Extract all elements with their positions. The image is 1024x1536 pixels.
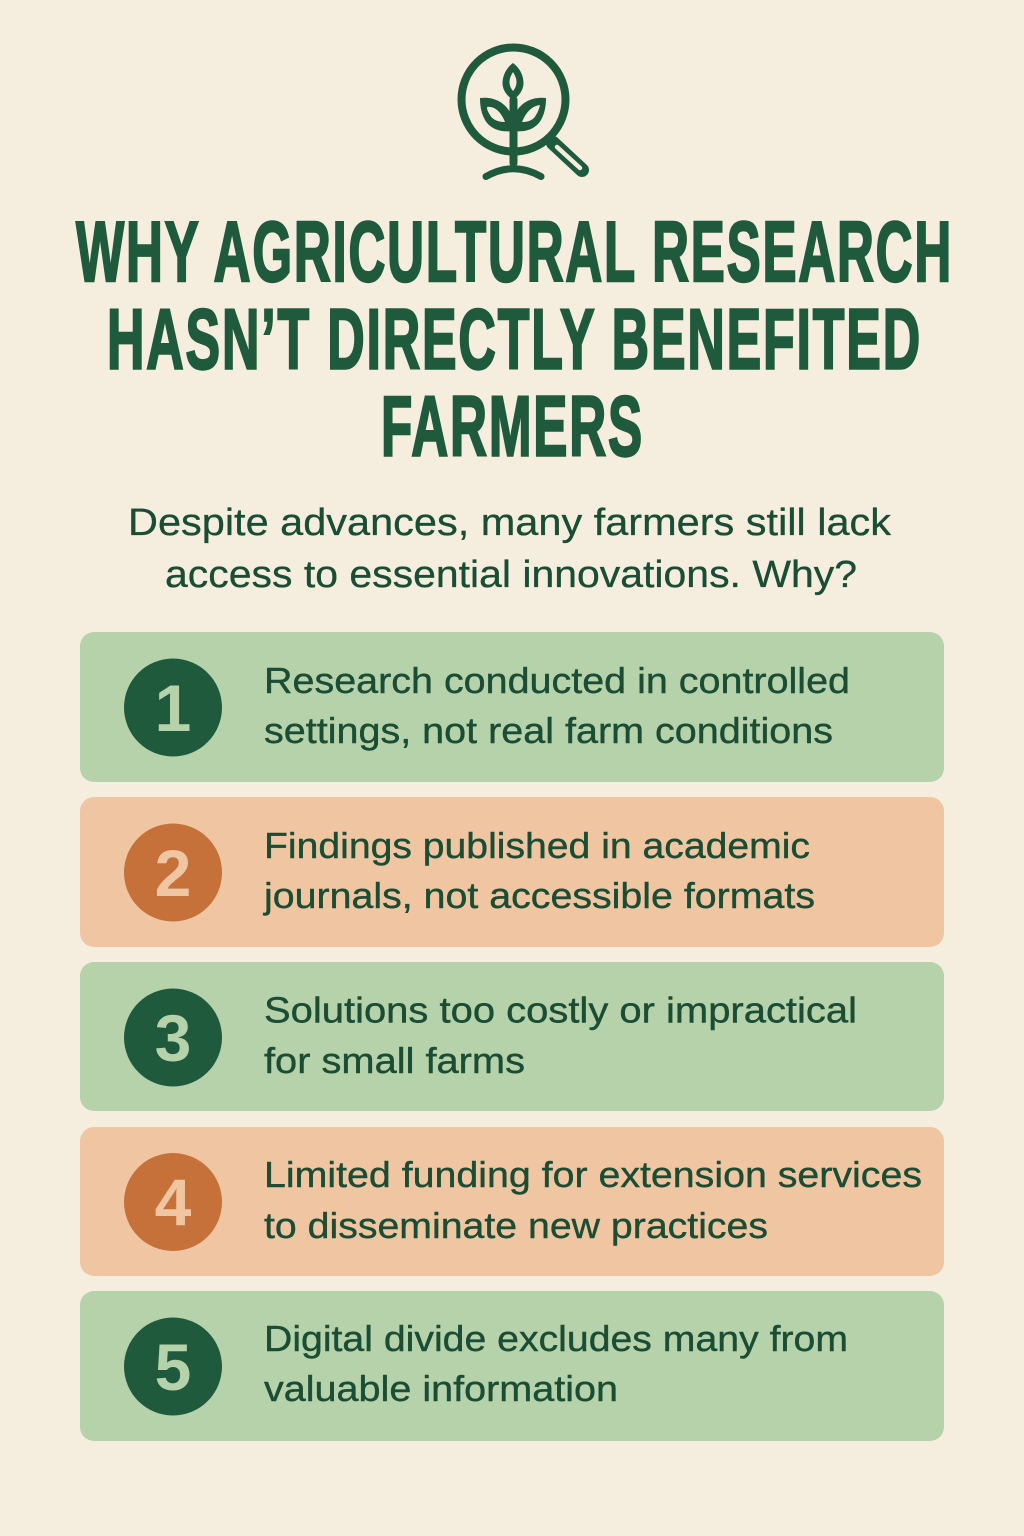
- panel: reason 1: [80, 632, 944, 782]
- panel: reason 4: [80, 1127, 944, 1276]
- number badge 2: [124, 824, 222, 922]
- reason 4 text: [264, 1154, 922, 1246]
- panel: reason 3: [80, 962, 944, 1111]
- reason 2 text: journals, not accessible formats: [263, 875, 815, 916]
- reason 5 text: [264, 1318, 848, 1409]
- reason 5 text: valuable information: [264, 1368, 618, 1409]
- reason 2 text: Findings published in academic: [264, 825, 810, 866]
- panel: reason 5: [80, 1291, 944, 1441]
- reason 1 text: [264, 660, 850, 751]
- number badge 4: 4: [155, 1165, 192, 1239]
- number badge 4: [124, 1153, 222, 1251]
- subtitle: Despite advances, many farmers still lack: [128, 502, 892, 544]
- number badge 1: [124, 658, 222, 756]
- number badge 3: [124, 988, 222, 1086]
- reason 1 text: Research conducted in controlled: [264, 660, 850, 701]
- number badge 2: 2: [155, 836, 191, 910]
- reason 5 text: Digital divide excludes many from: [264, 1318, 848, 1359]
- subtitle: access to essential innovations. Why?: [165, 554, 857, 596]
- title: [76, 205, 953, 474]
- reason 3 text: [264, 990, 857, 1081]
- subtitle: [128, 502, 892, 596]
- icon: magnifying glass with plant: [462, 48, 582, 176]
- reason 4 text: to disseminate new practices: [264, 1205, 768, 1246]
- panel: reason 2: [80, 797, 944, 947]
- number badge 3: 3: [155, 1001, 191, 1075]
- number badge 5: 5: [155, 1330, 191, 1404]
- reason 4 text: Limited funding for extension services: [264, 1154, 922, 1195]
- reason 1 text: settings, not real farm conditions: [264, 710, 833, 751]
- number badge 5: [124, 1318, 222, 1416]
- title: FARMERS: [381, 380, 644, 474]
- number badge 1: 1: [155, 671, 191, 745]
- reason 3 text: for small farms: [264, 1040, 525, 1081]
- reason 2 text: [263, 825, 815, 916]
- reason 3 text: Solutions too costly or impractical: [264, 990, 857, 1030]
